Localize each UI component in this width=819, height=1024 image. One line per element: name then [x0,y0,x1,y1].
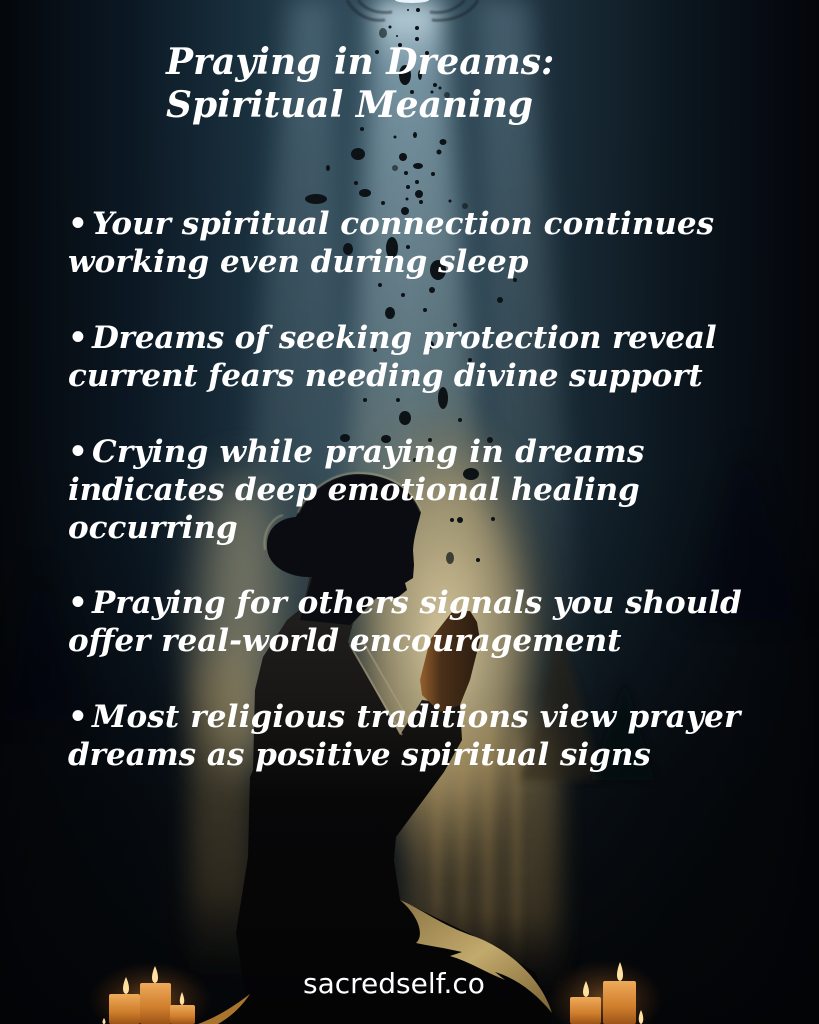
bullet 2: • [68,320,88,356]
bullet 2 [68,320,716,394]
candles [88,960,663,1024]
bullet 4 [68,585,742,659]
bullet 2: Dreams of seeking protection reveal [92,320,716,356]
bullet 5: dreams as positive spiritual signs [68,737,651,773]
title: Spiritual Meaning [166,84,533,126]
bullet 3: • [68,434,88,470]
bullet 3: indicates deep emotional healing [68,472,640,508]
praying hands [420,611,480,712]
bullet 3: occurring [68,510,238,546]
website footer: sacredself.co [303,967,485,1000]
bullet 3: Crying while praying in dreams [92,434,645,470]
body [200,575,552,1024]
bullet 1: working even during sleep [68,244,528,280]
bullet 4: • [68,585,88,621]
title: Praying in Dreams: [166,41,554,83]
bullet 2: current fears needing divine support [68,358,702,394]
black particles [305,8,517,564]
bullet 4: offer real-world encouragement [68,623,621,659]
praying woman silhouette [198,473,552,1024]
bullet 4: Praying for others signals you should [92,585,742,621]
hair rim light [264,473,421,550]
eye shape at top [347,0,478,20]
bullet 1: Your spiritual connection continues [92,206,714,242]
golden highlight on robe [400,900,552,1013]
bullet list [68,206,742,773]
bullet 5: • [68,699,88,735]
bullet 3 [68,434,645,546]
warm glow behind the figure [190,400,560,990]
head and hair [267,474,421,625]
bullet 1: • [68,206,88,242]
bullet 5: Most religious traditions view prayer [92,699,741,735]
bullet 5 [68,699,742,773]
title [165,41,554,126]
bullet 1 [68,206,714,280]
robe stripes [350,640,412,735]
fir trees [0,440,800,780]
